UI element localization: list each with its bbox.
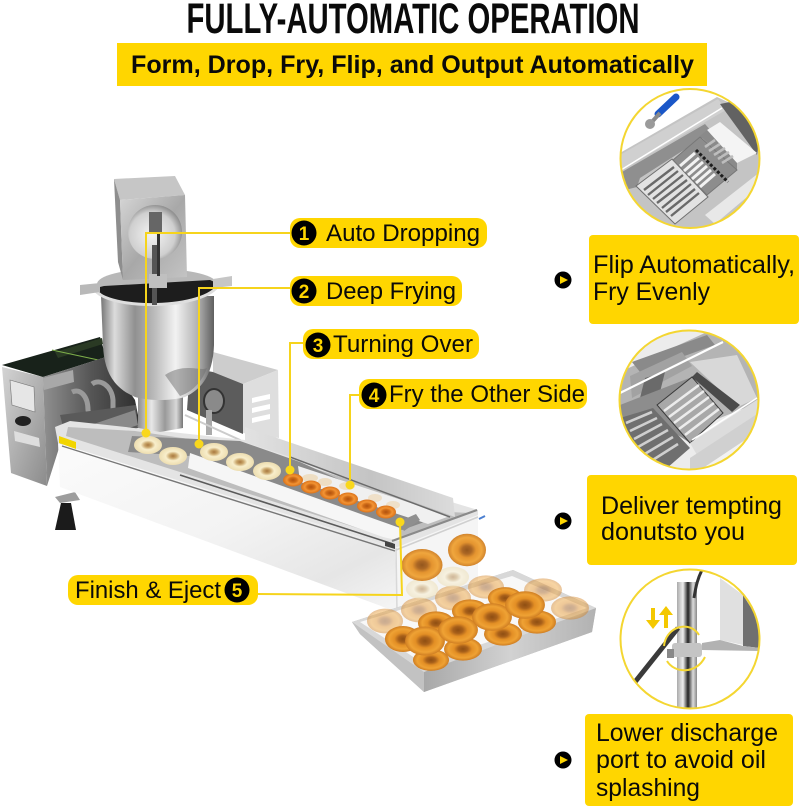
golden donuts in tray: [385, 587, 556, 671]
left control box: [2, 337, 140, 486]
front panel: [58, 443, 397, 612]
right end panel: [395, 515, 478, 612]
detail circle: discharge port height adjustment: [620, 569, 760, 712]
label: fry the other side: 4: [369, 386, 380, 407]
detail circle: turning rack: [620, 330, 760, 472]
falling donuts: [401, 534, 486, 599]
subtitle banner: [117, 43, 707, 86]
info box: lower discharge port: [585, 714, 793, 806]
info box: flip automatically: Fry Evenly: [593, 278, 710, 306]
arrows: rotation ring: [664, 627, 705, 670]
hopper bowl: [80, 269, 232, 400]
fryer trough body: [55, 421, 485, 612]
info box: flip automatically: Flip Automatically,: [593, 251, 795, 279]
raw donuts on conveyor: [134, 436, 281, 480]
callout lines: [146, 233, 402, 595]
funnel: [138, 390, 183, 432]
machine foot: [55, 492, 80, 530]
fried donuts on conveyor: [283, 474, 400, 518]
info box: deliver tempting donuts: [587, 475, 797, 565]
info box: deliver tempting donuts: donutsto you: [601, 518, 745, 546]
play icon 3: [554, 752, 572, 768]
donut tray: [352, 570, 596, 692]
label: finish and eject: [68, 575, 258, 605]
info box: flip automatically: [589, 235, 799, 324]
label: deep frying: Deep Frying: [326, 278, 456, 305]
play icon 1: [554, 272, 572, 288]
faded donuts in tray: [367, 575, 589, 633]
subtitle banner: Form, Drop, Fry, Flip, and Output Automatically: [131, 51, 694, 79]
play icon 2: [554, 512, 572, 530]
white guard: [188, 453, 400, 541]
info box: deliver tempting donuts: Deliver tempting: [601, 492, 782, 520]
label: deep frying: 2: [299, 282, 309, 303]
label: auto dropping: Auto Dropping: [326, 220, 480, 247]
back shield: [245, 427, 455, 517]
info box: lower discharge port: port to avoid oil: [596, 746, 766, 774]
label: finish and eject: 5: [232, 581, 243, 602]
top deck: [55, 421, 478, 548]
callout anchor dots: [142, 428, 404, 526]
label: auto dropping: 1: [299, 224, 310, 245]
label: fry the other side: Fry the Other Side: [389, 381, 585, 408]
label: turning over: Turning Over: [333, 331, 473, 358]
rail lines: [62, 446, 395, 551]
dropper head: [114, 176, 187, 305]
arrows: up and down: [646, 606, 673, 629]
conveyor channel: [128, 436, 430, 530]
label: finish and eject: Finish & Eject: [75, 577, 221, 604]
label: turning over: 3: [313, 336, 323, 357]
info box: lower discharge port: Lower discharge: [596, 719, 778, 747]
right side box: [185, 352, 279, 445]
label: deep frying: [290, 276, 462, 306]
donut machine illustration: [2, 176, 596, 692]
detail circle: flip trays with blue valve: [620, 88, 760, 240]
info box: lower discharge port: splashing: [596, 774, 700, 802]
